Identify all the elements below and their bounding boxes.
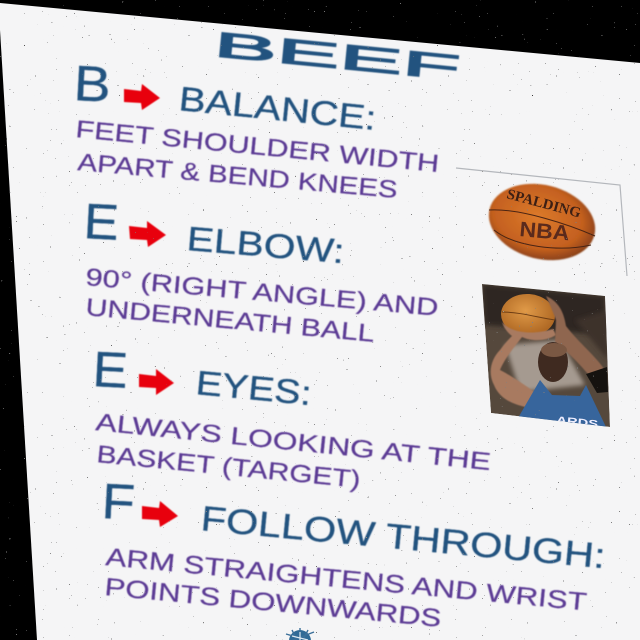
icon: spalding basketball: NBA [519,218,570,245]
letter F: F [100,473,136,531]
icon: spalding basketball [481,173,603,271]
player left arm [491,322,556,408]
heading: elbow: ELBOW: [185,220,346,271]
icon: snowflake ornament [286,628,314,640]
section: elbow [82,193,439,348]
photo: player shooting [482,284,610,430]
text: underneath ball: UNDERNEATH BALL [84,294,376,348]
player jersey [518,380,606,427]
letter E: E [82,193,120,251]
player head [538,342,568,382]
letter E: E [91,341,129,399]
section: balance [72,55,440,204]
ball in photo [501,294,555,333]
text: wrist points downwards: POINTS DOWNWARDS [103,573,443,633]
arrow: F to follow through [142,501,178,527]
icon: spalding basketball: SPALDING [505,186,583,222]
text: right angle: 90° (RIGHT ANGLE) AND [84,264,439,322]
text: always looking: ALWAYS LOOKING AT THE [94,409,492,476]
section: eyes [91,341,492,494]
text: basket target: BASKET (TARGET) [95,441,362,494]
section: follow through [100,473,607,633]
text: apart and bend knees: APART & BEND KNEES [76,149,399,204]
player right arm [546,296,604,374]
photo: player shooting: ARDS [556,415,599,430]
heading: balance: BALANCE: [177,80,378,138]
title: BEEF [212,25,462,88]
image frame lines [456,168,627,276]
text: feet shoulder width: FEET SHOULDER WIDTH [74,116,440,178]
arrow: E to elbow [129,221,166,247]
heading: eyes: EYES: [194,364,313,413]
heading: follow through: FOLLOW THROUGH: [199,499,607,576]
letter B: B [72,55,112,113]
text: arm straightens: ARM STRAIGHTENS AND WRIST [104,543,588,616]
arrow: B to balance [124,84,160,110]
arrow: E to eyes [139,369,174,395]
